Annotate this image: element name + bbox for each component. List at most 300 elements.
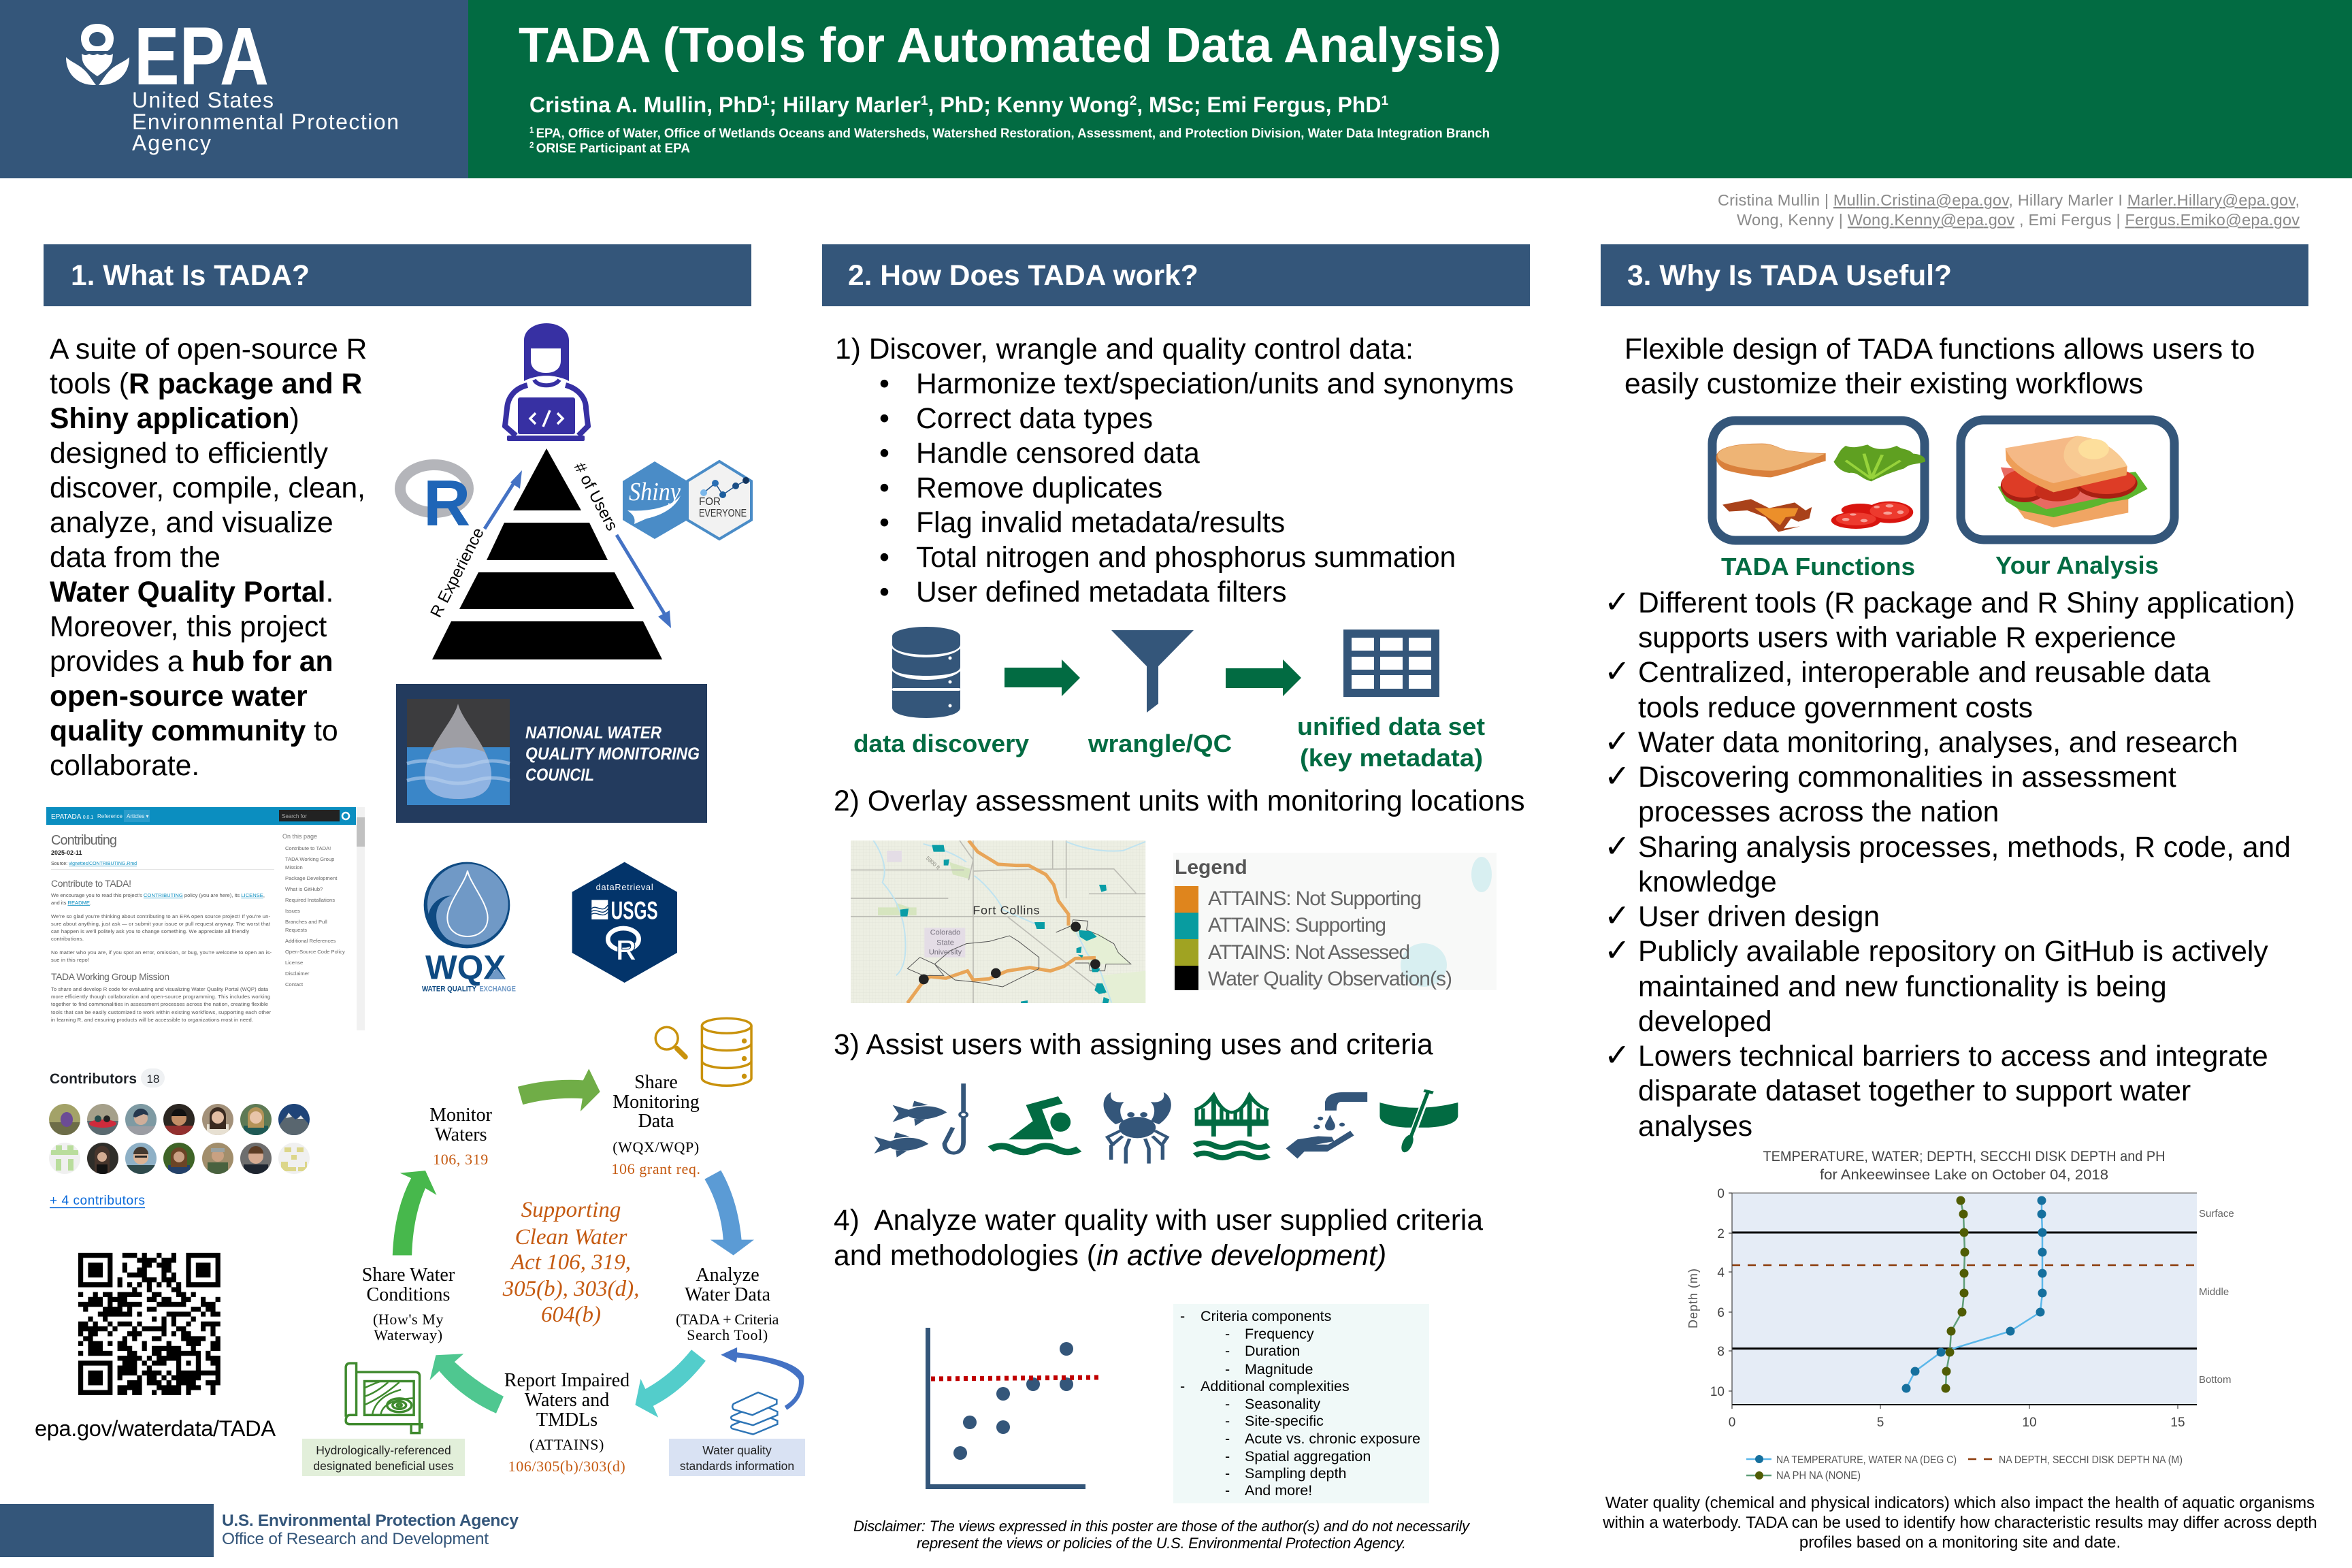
icon: Shiny hex [623, 461, 687, 539]
affiliations: 1 [529, 125, 536, 135]
icon: canoe [1379, 1090, 1458, 1153]
step: share monitoring data: Data [638, 1111, 674, 1132]
disclaimer: represent the views or policies of the U.S. Environmental Protection Agency. [917, 1535, 1406, 1552]
intro text: analyze, and visualize [50, 506, 333, 539]
screenshot: contributing page [46, 807, 365, 1030]
step 1 list: • [879, 506, 889, 539]
intro [1624, 333, 2255, 400]
contributors block [49, 1068, 310, 1208]
chart title: for Ankeewinsee Lake on October 04, 2018 [1820, 1166, 2108, 1183]
step: report impaired waters [504, 1370, 630, 1475]
x axis labels: 10 [2022, 1416, 2037, 1430]
criteria list: - [1180, 1308, 1185, 1324]
checklist: ✓ [1604, 828, 1631, 864]
box: your analysis sandwich [1961, 420, 2174, 540]
chart legend [1746, 1454, 2183, 1482]
y axis labels: 6 [1717, 1306, 1725, 1320]
intro text: discover, compile, clean, [50, 472, 365, 504]
heading 2 [822, 244, 1530, 306]
step: share water conditions: Share Water [362, 1264, 455, 1286]
screenshot: contributing page: 2025-02-11 [51, 849, 82, 856]
screenshot: contributing page: No matter who you are, if you spot an error, omission, or bug, you're welcome to open an is- [51, 949, 272, 956]
logo: National Water Quality Monitoring Council [396, 684, 707, 823]
logo: WQX: EXCHANGE [479, 985, 516, 994]
screenshot: contributing page: Open-Source Code Policy [285, 949, 345, 955]
checklist: ✓ [1604, 1036, 1631, 1073]
step 1 list: Handle censored data [916, 437, 1200, 470]
step: report impaired waters: Waters and [525, 1390, 609, 1411]
step: report impaired waters: TMDLs [536, 1409, 598, 1431]
checklist: maintained and new functionality is being [1638, 970, 2167, 1003]
icon: developer at laptop [505, 323, 588, 441]
icon: bread [1716, 444, 1826, 477]
map: Colorado [930, 928, 960, 936]
criteria list: - [1225, 1448, 1230, 1465]
chart caption [1602, 1494, 2317, 1552]
intro: easily customize their existing workflows [1624, 368, 2143, 400]
chart caption: profiles based on a monitoring site and date. [1799, 1533, 2121, 1552]
logo: USGS dataRetrieval [572, 862, 677, 983]
logo: USGS dataRetrieval: dataRetrieval [596, 883, 653, 892]
label: your analysis: Your Analysis [1995, 551, 2159, 579]
checklist: developed [1638, 1005, 1772, 1038]
screenshot: contributing page: Required Installations [285, 897, 335, 903]
criteria list: Acute vs. chronic exposure [1245, 1431, 1420, 1447]
screenshot: contributing page: in learning R, and ensuring products will be accessible to organizations most in need. [51, 1017, 253, 1023]
checklist: Discovering commonalities in assessment [1638, 761, 2176, 794]
icon: R for everyone hex: FOR [699, 496, 721, 508]
criteria list: And more! [1245, 1482, 1312, 1499]
screenshot: contributing page: Search for [282, 813, 307, 819]
step: share water conditions: Conditions [367, 1284, 450, 1305]
criteria list: - [1180, 1378, 1185, 1394]
step: analyze water data [676, 1264, 779, 1343]
checklist: Lowers technical barriers to access and integrate [1638, 1040, 2268, 1073]
contributor avatars [49, 1104, 310, 1174]
footer: agency block: Office of Research and Development [222, 1530, 489, 1548]
screenshot: contributing page: contributions. [51, 936, 84, 942]
screenshot: contributing page: sure about anything, just ask — or submit your issue or pull request anyway. The worst that [51, 921, 271, 927]
criteria list: - [1225, 1396, 1230, 1412]
step 1 list: Harmonize text/speciation/units and synonyms [916, 368, 1514, 400]
agency name: Environmental Protection [132, 110, 399, 134]
screenshot: contributing page: On this page [282, 833, 317, 840]
step 4 heading [834, 1204, 1483, 1272]
water quality cycle diagram [302, 1018, 805, 1476]
label: standards information: standards information [680, 1459, 794, 1473]
screenshot: contributing page: sue in this repo! [51, 957, 89, 963]
step: share monitoring data: Share [634, 1072, 678, 1093]
screenshot: contributing page: tools that can be easily customized to work within existing workflows, supporting each other [51, 1009, 271, 1015]
box: TADA functions ingredients [1712, 421, 1925, 540]
authors: 2 [1130, 94, 1137, 108]
x axis labels [1729, 1416, 2185, 1430]
criteria list: - [1225, 1326, 1230, 1342]
chart legend: NA PH NA (NONE) [1776, 1470, 1861, 1482]
icon: R for everyone hex [687, 461, 751, 539]
icon: map scroll [346, 1363, 422, 1433]
criteria list: Duration [1245, 1343, 1300, 1359]
affiliations: ORISE Participant at EPA [536, 141, 690, 156]
y axis title: Depth (m) [1686, 1269, 1700, 1328]
y axis labels: 10 [1710, 1385, 1725, 1399]
icon: funnel [1111, 630, 1194, 713]
checklist: Water data monitoring, analyses, and research [1638, 726, 2238, 759]
screenshot: contributing page: We're so glad you're thinking about contributing to an EPA open source project! If you're un- [51, 913, 270, 919]
intro: Flexible design of TADA functions allows users to [1624, 333, 2255, 365]
arrow [1226, 659, 1301, 696]
step: monitor waters: Waters [434, 1124, 487, 1145]
icon: books [731, 1392, 777, 1435]
x axis labels: 5 [1877, 1416, 1884, 1430]
header banner [0, 0, 2352, 178]
criteria list: - [1225, 1482, 1230, 1499]
step 1 list: Total nitrogen and phosphorus summation [916, 541, 1456, 574]
label: wrangle: wrangle/QC [1088, 730, 1232, 757]
checklist: supports users with variable R experience [1638, 621, 2176, 654]
screenshot: contributing page: EPATADA 0.0.1 [51, 813, 93, 821]
zone labels: Bottom [2199, 1374, 2232, 1386]
step: report impaired waters: 106/305(b)/303(d) [508, 1458, 625, 1475]
map: 5900 ft [925, 855, 941, 871]
screenshot: contributing page: together to find commonalities in assessment processes across the nation, creating flexible [51, 1001, 268, 1007]
contact line [1718, 191, 2300, 229]
authors: 1 [1381, 94, 1388, 108]
checklist: User driven design [1638, 900, 1880, 933]
map [851, 840, 1145, 1003]
screenshot: contributing page: TADA Working Group Mission [51, 971, 169, 982]
arrow: up [485, 478, 517, 529]
logo: National Water Quality Monitoring Council: NATIONAL WATER [525, 723, 662, 742]
icon: lettuce [1833, 444, 1925, 481]
intro text: collaborate. [50, 749, 199, 782]
checklist: ✓ [1604, 897, 1631, 934]
icon: bridge [1195, 1096, 1269, 1158]
label: designated uses: designated beneficial uses [313, 1459, 454, 1473]
map legend: ATTAINS: Not Assessed [1208, 941, 1410, 964]
EPA logo: EPA [134, 10, 269, 102]
center text: clean water act [502, 1198, 639, 1327]
checklist: ✓ [1604, 723, 1631, 760]
zone labels: Surface [2199, 1208, 2234, 1220]
QR code [78, 1256, 220, 1392]
step 1 list: Flag invalid metadata/results [916, 506, 1285, 539]
step: share monitoring data: Monitoring [612, 1092, 700, 1113]
authors: , MSc; Emi Fergus, PhD [1137, 93, 1381, 117]
step: monitor waters [429, 1105, 493, 1168]
label: unified data set: unified data set [1297, 713, 1485, 740]
checklist: disparate dataset together to support water [1638, 1075, 2191, 1107]
icon: R for everyone hex: EVERYONE [699, 508, 747, 519]
step 1 list [835, 333, 1514, 608]
logo: WQX: WQX [425, 949, 506, 987]
agency name [132, 88, 399, 155]
heading 1 [44, 244, 751, 306]
map legend: ATTAINS: Supporting [1208, 914, 1386, 936]
screenshot: contributing page: Additional References [285, 938, 336, 944]
criteria list: Frequency [1245, 1326, 1314, 1342]
intro text: data from the [50, 541, 220, 574]
criteria list: Seasonality [1245, 1396, 1320, 1412]
chart legend: NA DEPTH, SECCHI DISK DEPTH NA (M) [1999, 1454, 2183, 1466]
screenshot: contributing page: To share and develop R code for evaluating and visualizing Water Quality Portal (WQP) data [51, 986, 269, 992]
heading 3 [1601, 244, 2308, 306]
authors: ; Hillary Marler [770, 93, 921, 117]
step: share water conditions [362, 1264, 455, 1343]
intro text: provides a hub for an [50, 645, 333, 678]
label: users: # of Users [570, 459, 621, 534]
checklist: ✓ [1604, 653, 1631, 689]
step: report impaired waters: (ATTAINS) [529, 1436, 604, 1453]
icon: table [1343, 630, 1439, 697]
criteria list [1173, 1304, 1429, 1503]
chart: depth profile [1686, 1148, 2234, 1482]
step: monitor waters: 106, 319 [433, 1151, 489, 1168]
link: more contributors: + 4 contributors [50, 1194, 145, 1208]
intro text [50, 333, 367, 782]
label: designated uses: Hydrologically-referenced [316, 1443, 451, 1457]
map legend [1173, 853, 1497, 990]
center text: clean water act: Clean Water [515, 1225, 627, 1250]
label: data discovery: data discovery [853, 730, 1029, 757]
screenshot: contributing page: Source: vignettes/CONTRIBUTING.Rmd [51, 862, 137, 866]
checklist: ✓ [1604, 583, 1631, 620]
zone labels: Middle [2199, 1286, 2229, 1298]
checklist: ✓ [1604, 757, 1631, 794]
intro text: Water Quality Portal. [50, 576, 333, 608]
screenshot: contributing page: Package Development [285, 875, 338, 881]
icon: data discovery [892, 627, 960, 718]
map legend: ATTAINS: Not Supporting [1208, 887, 1422, 910]
chart title [1763, 1148, 2166, 1183]
screenshot: contributing page: Contributing [51, 833, 117, 848]
y axis labels: 8 [1717, 1345, 1725, 1359]
screenshot: contributing page: Contribute to TADA! [51, 878, 131, 889]
affiliations [529, 125, 1490, 156]
step 1 list: • [879, 541, 889, 574]
logo: USGS dataRetrieval: USGS [611, 897, 658, 925]
chart caption: within a waterbody. TADA can be used to identify how characteristic results may differ across depth [1602, 1514, 2317, 1532]
center text: clean water act: 604(b) [541, 1303, 601, 1327]
affiliations: 2 [529, 140, 536, 150]
arrow head up [510, 470, 522, 489]
step 4 heading: 4) Analyze water quality with user supplied criteria [834, 1204, 1483, 1237]
arrow [1004, 659, 1080, 696]
step 1 list: • [879, 368, 889, 400]
criteria list: Site-specific [1245, 1413, 1324, 1429]
pH series [1941, 1196, 1970, 1392]
step: report impaired waters: Report Impaired [504, 1370, 630, 1391]
intro text: A suite of open-source R [50, 333, 367, 365]
center text: clean water act: Act 106, 319, [510, 1250, 631, 1275]
screenshot: contributing page: and its README. [51, 900, 91, 906]
agency name: Agency [132, 131, 211, 155]
icon: fishing [874, 1083, 967, 1158]
label: standards information: Water quality [702, 1443, 772, 1457]
step: monitor waters: Monitor [429, 1105, 493, 1126]
criteria list: Sampling depth [1245, 1465, 1346, 1482]
disclaimer [853, 1518, 1471, 1552]
map legend: Water Quality Observation(s) [1208, 968, 1452, 990]
screenshot: contributing page: TADA Working Group [285, 856, 334, 862]
map: Fort Collins [973, 903, 1040, 917]
step: share water conditions: (How's My [373, 1311, 444, 1328]
footer: agency block: U.S. Environmental Protection Agency [222, 1512, 519, 1530]
y axis labels: 4 [1717, 1266, 1725, 1280]
logo: National Water Quality Monitoring Council: QUALITY MONITORING [525, 745, 700, 764]
title: TADA (Tools for Automated Data Analysis) [519, 18, 1501, 73]
panel: why is TADA useful [1601, 244, 2317, 1552]
checklist: Sharing analysis processes, methods, R code, and [1638, 831, 2291, 864]
label: R Experience: R Experience [427, 525, 488, 621]
intro text: designed to efficiently [50, 437, 329, 470]
icon: tomatoes [1831, 502, 1913, 529]
contributors block: 18 [147, 1073, 159, 1085]
screenshot: contributing page: Issues [285, 908, 300, 914]
disclaimer: Disclaimer: The views expressed in this poster are those of the author(s) and do not necessarily [853, 1518, 1471, 1535]
step: analyze water data: (TADA + Criteria [676, 1311, 779, 1328]
pyramid: R experience vs users [427, 448, 671, 659]
authors: Cristina A. Mullin, PhD [529, 93, 762, 117]
screenshot: contributing page: We encourage you to read this project's CONTRIBUTING policy (you are here), its LICENSE, [51, 892, 265, 898]
chart legend: NA TEMPERATURE, WATER NA (DEG C) [1776, 1454, 1957, 1466]
footer: agency block [0, 1504, 519, 1557]
cycle arrows [393, 1068, 804, 1418]
intro text: Shiny application) [50, 402, 299, 435]
screenshot: contributing page: What is GitHub? [285, 886, 323, 892]
intro text: open-source water [50, 680, 308, 713]
criteria list: Magnitude [1245, 1361, 1313, 1377]
step 4 heading: and methodologies (in active development) [834, 1239, 1386, 1272]
panel: how does TADA work [822, 244, 1530, 1552]
chart title: TEMPERATURE, WATER; DEPTH, SECCHI DISK DEPTH and PH [1763, 1148, 2166, 1164]
icon: swimmer [991, 1096, 1079, 1152]
y axis labels [1710, 1187, 1725, 1399]
panel: what is TADA [0, 244, 805, 1557]
step 3 heading: 3) Assist users with assigning uses and criteria [834, 1028, 1433, 1061]
checklist: analyses [1638, 1110, 1752, 1143]
checklist: tools reduce government costs [1638, 691, 2033, 724]
label: designated uses [302, 1439, 465, 1476]
criteria list: Spatial aggregation [1245, 1448, 1371, 1465]
screenshot: contributing page: Requests [285, 927, 307, 933]
QR caption: epa.gov/waterdata/TADA [35, 1416, 276, 1441]
screenshot: contributing page: more efficiently though collaboration and open-source programming. This includes working [51, 994, 270, 1000]
label: TADA functions: TADA Functions [1721, 553, 1915, 581]
intro text: quality community to [50, 715, 338, 747]
logo: WQX: WATER QUALITY [422, 985, 477, 994]
step: analyze water data: Search Tool) [687, 1326, 768, 1343]
label: unified data set: (key metadata) [1300, 744, 1483, 772]
step 1 list: Remove duplicates [916, 472, 1162, 504]
step 2 heading: 2) Overlay assessment units with monitoring locations [834, 785, 1525, 817]
x axis labels: 0 [1729, 1416, 1735, 1430]
checklist: knowledge [1638, 866, 1777, 898]
step 1 list: • [879, 402, 889, 435]
checklist: Publicly available repository on GitHub is actively [1638, 935, 2268, 968]
center text: clean water act: Supporting [521, 1198, 621, 1222]
authors: , PhD; Kenny Wong [928, 93, 1130, 117]
screenshot: contributing page: Contact [285, 981, 304, 987]
step: analyze water data: Water Data [685, 1284, 771, 1305]
criteria list: - [1225, 1361, 1230, 1377]
affiliations: EPA, Office of Water, Office of Wetlands Oceans and Watersheds, Watershed Restoration, Assessment, and Protection Division, Water Data Integration Branch [536, 126, 1490, 141]
screenshot: contributing page: Branches and Pull [285, 919, 327, 925]
icon: crab [1104, 1092, 1171, 1164]
heading 3: 3. Why Is TADA Useful? [1627, 260, 1952, 292]
icon: R logo [400, 465, 470, 540]
step 1 list: • [879, 437, 889, 470]
contributors block: Contributors [50, 1071, 137, 1087]
y axis labels: 2 [1717, 1227, 1725, 1241]
label: unified data set [1297, 713, 1485, 772]
step: share monitoring data: (WQX/WQP) [612, 1139, 700, 1156]
y axis labels: 0 [1717, 1187, 1725, 1201]
criteria list: Additional complexities [1200, 1378, 1350, 1394]
map legend: Legend [1175, 856, 1247, 879]
screenshot: contributing page: License [285, 960, 303, 966]
icon: Shiny hex: Shiny [629, 478, 681, 506]
arrow: down [617, 535, 667, 618]
criteria list: - [1225, 1343, 1230, 1359]
logo: National Water Quality Monitoring Council: COUNCIL [525, 766, 594, 785]
screenshot: contributing page: Articles ▾ [127, 813, 148, 819]
label: standards information [669, 1439, 805, 1476]
authors: 1 [921, 94, 928, 108]
checklist [1604, 583, 2295, 1143]
map: State [936, 938, 954, 947]
x axis labels: 15 [2170, 1416, 2185, 1430]
step: share water conditions: Waterway) [374, 1326, 443, 1343]
criteria list: - [1225, 1413, 1230, 1429]
temperature series [1901, 1196, 2047, 1392]
authors: 1 [762, 94, 770, 108]
zone labels [2199, 1208, 2234, 1386]
arrow head down [658, 610, 671, 628]
intro text: Moreover, this project [50, 610, 327, 643]
checklist: Different tools (R package and R Shiny application) [1638, 587, 2295, 619]
step: analyze water data: Analyze [696, 1264, 760, 1286]
step: share monitoring data: 106 grant req. [611, 1160, 701, 1177]
checklist: Centralized, interoperable and reusable data [1638, 656, 2210, 689]
chart caption: Water quality (chemical and physical indicators) which also impact the health of aquatic organisms [1605, 1494, 2315, 1512]
chart: criteria scatter [926, 1328, 1098, 1489]
step 1 list: Correct data types [916, 402, 1153, 435]
criteria list: - [1225, 1465, 1230, 1482]
step 1 list: • [879, 576, 889, 608]
step 1 list: User defined metadata filters [916, 576, 1287, 608]
step 1 list: 1) Discover, wrangle and quality control data: [835, 333, 1414, 365]
logo: USGS dataRetrieval: R [616, 934, 636, 966]
logo: WQX [422, 862, 516, 994]
icon: R logo: R [423, 467, 470, 540]
criteria list: - [1225, 1431, 1230, 1447]
checklist: processes across the nation [1638, 796, 1999, 828]
step 1 list: • [879, 472, 889, 504]
contact line: Wong, Kenny | Wong.Kenny@epa.gov , Emi Fergus | Fergus.Emiko@epa.gov [1737, 211, 2300, 229]
screenshot: contributing page: Reference [97, 813, 122, 819]
icon: search and database [655, 1018, 751, 1085]
criteria list: Criteria components [1200, 1308, 1331, 1324]
heading 1: 1. What Is TADA? [71, 260, 310, 292]
map: University [929, 949, 962, 957]
agency name: United States [132, 88, 274, 112]
screenshot: contributing page: can happen is we'll politely ask you to change something. We appreciate all friendly [51, 928, 249, 934]
screenshot: contributing page: Contribute to TADA! [285, 845, 331, 851]
icon: bacon [1722, 499, 1812, 532]
center text: clean water act: 305(b), 303(d), [502, 1277, 639, 1301]
icon: tap and hand [1286, 1092, 1367, 1159]
